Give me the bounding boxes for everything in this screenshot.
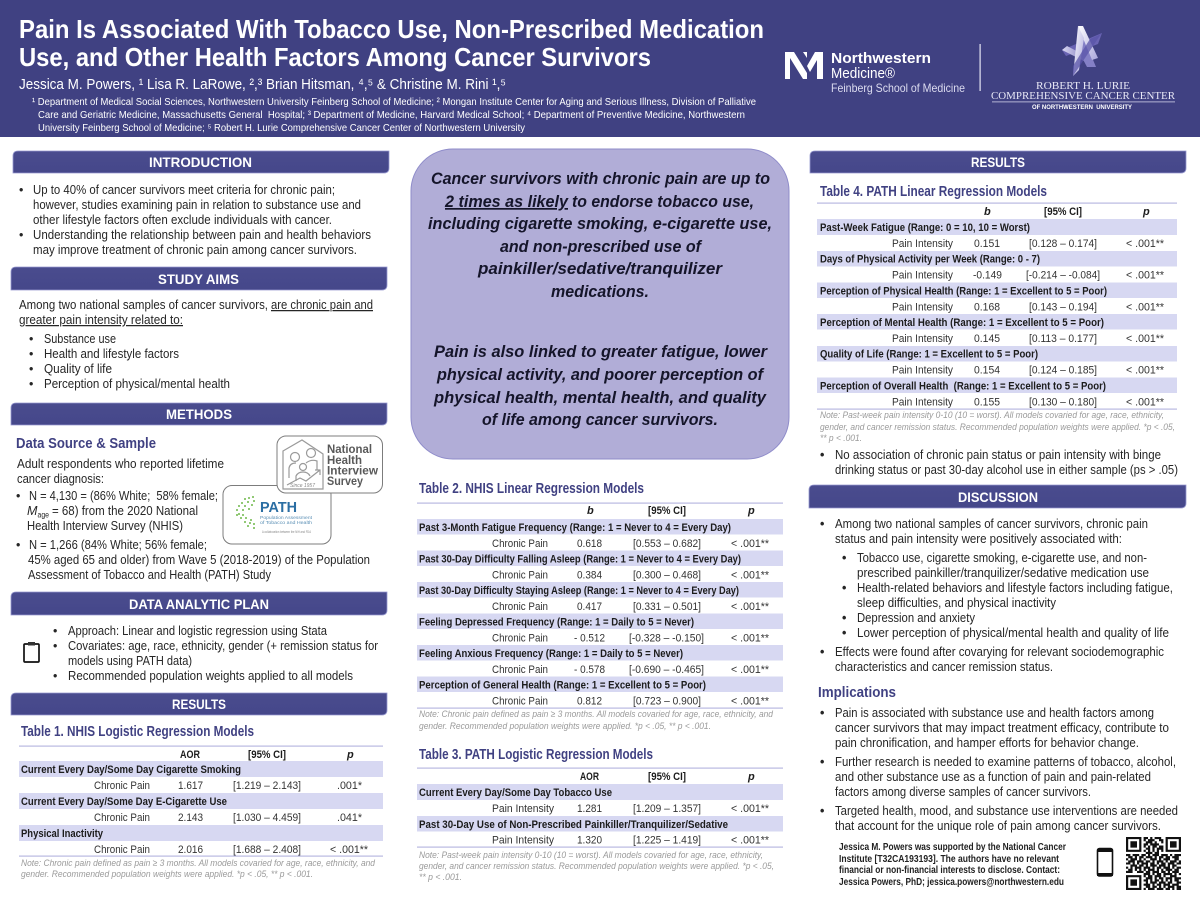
table title: table 4: Table 4. PATH Linear Regression Models [820,184,1047,200]
table 3: [1.225 – 1.419] [633,834,701,846]
text: sample description: 45% aged 65 and older) from Wave 5 (2018-2019) of the Population [28,553,370,567]
logo: Northwestern Medicine: Feinberg School of Medicine [831,81,965,95]
logo: National Health Interview Survey [277,436,382,493]
table 4: b [984,206,991,218]
table 4: [0.124 – 0.185] [1029,365,1097,377]
table 2: Past 3-Month Fatigue Frequency (Range: 1 = Never to 4 = Every Day) [419,522,731,534]
table 4: Pain Intensity [892,333,953,345]
table 1: < .001** [330,844,369,856]
table 3: Pain Intensity [492,803,554,815]
table note: table 2: Note: Chronic pain defined as pain ≥ 3 months. All models covaried for age, race, ethnicity, and [419,709,774,720]
table 4: < .001** [1126,238,1165,250]
table 3: Pain Intensity [492,834,554,846]
text: discussion findings: Among two national samples of cancer survivors, chronic pain [835,517,1148,531]
table note: table 1: gender. Recommended population weights were applied. *p < .05, ** p < .001. [21,869,313,880]
heading: results: RESULTS [172,696,226,712]
panel: study aims: Perception of physical/mental health [44,377,230,391]
table 1: p [346,749,354,761]
logo: National Health Interview Survey: Health [327,455,362,467]
text: implications: Further research is needed to examine patterns of tobacco, alcohol, [835,755,1176,769]
panel: study aims: greater pain intensity related to: [19,313,183,327]
affiliations: University Feinberg School of Medicine; ⁵ Robert H. Lurie Comprehensive Cancer Center of Northwestern University [38,122,526,134]
table 4: < .001** [1126,333,1165,345]
table 4: [-0.214 – -0.084] [1026,270,1100,282]
table title: table 2: Table 2. NHIS Linear Regression Models [419,481,644,497]
text: implications: and other substance use as a function of pain and pain-related [835,770,1151,784]
callout: key findings: medications. [551,282,649,301]
table 1: 2.143 [178,812,203,824]
table 2: 0.417 [577,601,602,613]
text: implications: Pain is associated with substance use and health factors among [835,706,1154,720]
panel: data analytic plan: models using PATH data) [68,654,192,668]
table 2: Feeling Depressed Frequency (Range: 1 = Daily to 5 = Never) [419,616,694,628]
table 2: b [587,505,594,517]
panel: study aims [11,267,387,391]
text: discussion findings: Tobacco use, cigarette smoking, e-cigarette use, and non- [857,551,1147,565]
text: no association finding: No association of chronic pain status or pain intensity with binge [835,448,1161,462]
title [19,14,764,72]
text: discussion findings: Effects were found after covarying for relevant sociodemographic [835,645,1164,659]
logo: Robert H. Lurie Comprehensive Cancer Center: COMPREHENSIVE CANCER CENTER [991,91,1175,102]
icon: house with family [283,440,323,489]
table 2: [-0.328 – -0.150] [629,632,704,644]
text: no association finding: • [820,448,824,462]
panel: results left, table 1 [11,693,387,880]
panel: study aims: are chronic pain and [271,298,373,312]
table 2: [-0.690 – -0.465] [629,664,704,676]
table 4: 0.145 [974,333,1000,345]
text: sample description: cancer diagnosis: [17,472,104,486]
table 2: [95% CI] [648,505,686,517]
header banner [0,0,1200,137]
panel: discussion [809,485,1186,833]
panel: data analytic plan [11,592,387,683]
text: discussion findings: sleep difficulties, and physical inactivity [857,596,1057,610]
heading: discussion [809,485,1186,508]
panel: study aims: • [29,377,33,391]
table 4: Pain Intensity [892,270,953,282]
text: sample description: N = 1,266 (84% White; 56% female; [29,538,207,552]
text: discussion findings: status and pain intensity were positively associated with: [835,532,1122,546]
table 1: [1.030 – 4.459] [233,812,301,824]
text: discussion findings: • [820,645,824,659]
table note: table 4 [820,410,1175,444]
table 4: < .001** [1126,396,1165,408]
table 4 [817,202,1177,410]
table 1: Physical Inactivity [21,828,104,840]
table 2: Chronic Pain [492,632,548,644]
table 3: 1.320 [577,834,602,846]
text: sample description: Assessment of Tobacco and Health (PATH) Study [28,568,272,582]
table 4: < .001** [1126,270,1165,282]
table 3: p [747,771,755,783]
table 4: < .001** [1126,365,1165,377]
table 2: Perception of General Health (Range: 1 = Excellent to 5 = Poor) [419,680,706,692]
logo: PATH [223,486,331,544]
icon: clipboard [24,642,39,662]
text: sample description [16,457,370,582]
table note: table 3: ** p < .001. [419,872,462,883]
panel: study aims: Health and lifestyle factors [44,347,179,361]
table 3: Current Every Day/Some Day Tobacco Use [419,787,612,799]
text: discussion findings: Health-related behaviors and lifestyle factors including fatigue, [857,581,1173,595]
text: discussion findings: • [842,551,846,565]
panel: introduction: however, studies examining pain in relation to substance use and [33,198,361,212]
table 4: < .001** [1126,301,1165,313]
icon: green dots [236,496,255,529]
table 3: < .001** [731,803,770,815]
panel: study aims: Among two national samples of cancer survivors, [19,298,268,312]
table 4: Quality of Life (Range: 1 = Excellent to 5 = Poor) [820,349,1038,361]
footer: funding and contact: Institute [T32CA193193]. The authors have no relevant [839,854,1060,865]
logo: National Health Interview Survey: Interview [327,466,378,478]
text: sample description: = 68) from the 2020 National [52,504,198,518]
table 4: Pain Intensity [892,301,953,313]
panel: study aims: Quality of life [44,362,112,376]
panel: data analytic plan: • [53,669,57,683]
panel: data analytic plan: Approach: Linear and logistic regression using Stata [68,624,327,638]
callout: key findings: physical activity, and poorer perception of [436,365,765,384]
table note: table 1: Note: Chronic pain defined as pain ≥ 3 months. All models covaried for age, race, ethnicity, and [21,858,376,869]
table 2: [0.553 – 0.682] [633,538,701,550]
panel: introduction [13,151,389,257]
table 3 [417,768,783,848]
table 2: < .001** [731,601,770,613]
panel: data analytic plan: Recommended population weights applied to all models [68,669,353,683]
table 2: < .001** [731,538,770,550]
table 1: Chronic Pain [94,812,150,824]
text: sample description: Health Interview Survey (NHIS) [27,519,183,533]
callout: key findings: including cigarette smoking, e-cigarette use, [428,214,772,233]
text: implications: • [820,706,824,720]
table 4: [0.143 – 0.194] [1029,301,1097,313]
table 2: [0.331 – 0.501] [633,601,701,613]
table 3: Past 30-Day Use of Non-Prescribed Painkiller/Tranquilizer/Sedative [419,819,728,831]
table 2: - 0.512 [574,632,605,644]
table note: table 3: Note: Past-week pain intensity 0-10 (10 = worst). All models covaried for age, race, ethnicity, [419,850,763,861]
table 3: 1.281 [577,803,602,815]
heading: introduction [13,151,389,173]
table 1: .041* [337,812,363,824]
table 2: Chronic Pain [492,538,548,550]
table 2 [417,502,783,709]
table note: table 4: Note: Past-week pain intensity 0-10 (10 = worst). All models covaried for age, race, ethnicity, [820,410,1164,421]
callout: key findings: Cancer survivors with chronic pain are up to [431,169,770,188]
panel: table 2 [417,481,783,732]
table 4: Perception of Overall Health (Range: 1 = Excellent to 5 = Poor) [820,380,1106,392]
heading: results [810,151,1186,173]
text: sample description: M [27,504,38,518]
logo: National Health Interview Survey: Since 1957 [290,483,315,489]
heading: data analytic plan: DATA ANALYTIC PLAN [129,596,269,612]
heading: results [11,693,387,715]
table 4: [95% CI] [1044,206,1082,218]
table 1: .001* [337,780,363,792]
logo: Robert H. Lurie Comprehensive Cancer Center: OF NORTHWESTERN UNIVERSITY [1032,105,1132,111]
table 2: < .001** [731,696,770,708]
table 4: p [1142,206,1150,218]
table note: table 1 [21,858,376,880]
table 3: [95% CI] [648,771,686,783]
table 4: Days of Physical Activity per Week (Range: 0 - 7) [820,254,1040,266]
icon: smartphone [1097,848,1113,876]
text: implications: pain chronification, and hamper efforts for behavior change. [835,736,1139,750]
panel: introduction: • [19,183,23,197]
heading: discussion: DISCUSSION [958,489,1038,505]
table 3: [1.209 – 1.357] [633,803,701,815]
logo: Northwestern Medicine: Medicine® [831,65,895,82]
QR code [1126,837,1181,890]
table note: table 2 [419,709,774,732]
text: discussion findings: prescribed painkiller/tranquilizer/sedative medication use [857,566,1149,580]
table note: table 3: gender, and cancer remission status. Recommended population weights were applied. *p < .05, [419,861,774,872]
logo: PATH: A collaboration between the NIH and FDA [262,530,312,534]
table 2: Chronic Pain [492,696,548,708]
footer: funding and contact [839,842,1066,888]
logo: Northwestern Medicine [785,50,965,95]
panel: introduction: Understanding the relationship between pain and health behaviors [33,228,371,242]
title: Pain Is Associated With Tobacco Use, Non-Prescribed Medication [19,14,764,44]
table 2: < .001** [731,632,770,644]
authors: Jessica M. Powers, ¹ Lisa R. LaRowe, ²,³ Brian Hitsman, ⁴,⁵ & Christine M. Rini ¹,⁵ [19,76,506,93]
panel: study aims: • [29,332,33,346]
table 4: Perception of Mental Health (Range: 1 = Excellent to 5 = Poor) [820,317,1104,329]
table 4: -0.149 [973,270,1002,282]
logo: PATH: of Tobacco and Health [260,520,313,525]
panel: introduction: Up to 40% of cancer survivors meet criteria for chronic pain; [33,183,335,197]
table 4: 0.151 [974,238,1000,250]
heading: data analytic plan [11,592,387,615]
affiliations: Care and Geriatric Medicine, Massachusetts General Hospital; ³ Department of Medicine, Harvard Medical School; ⁴ Department of Preventive Medicine, Northwestern [38,109,745,121]
logo: Robert H. Lurie Comprehensive Cancer Center: ROBERT H. LURIE [1036,81,1130,92]
logo: Northwestern Medicine: Northwestern [831,50,931,67]
table 2: [0.723 – 0.900] [633,696,701,708]
table 2: Chronic Pain [492,664,548,676]
table 2: Chronic Pain [492,601,548,613]
text: implications: that account for the unique role of pain among cancer survivors. [835,819,1161,833]
callout: key findings: painkiller/sedative/tranquilizer [477,259,723,278]
table 1: [1.219 – 2.143] [233,780,301,792]
table 2: p [747,505,755,517]
logo: National Health Interview Survey: National [327,444,372,456]
table 1: 2.016 [178,844,203,856]
heading: results: RESULTS [971,154,1025,170]
table 3: AOR [580,771,599,783]
callout: key findings [411,149,789,459]
text: sample description: • [16,489,20,503]
text: sample description: • [16,538,20,552]
icon: ribbon star [1062,26,1102,76]
title: Use, and Other Health Factors Among Cancer Survivors [19,42,651,72]
table 4: [0.130 – 0.180] [1029,396,1097,408]
table 4: Pain Intensity [892,365,953,377]
text: discussion findings: • [820,517,824,531]
text: implications: cancer survivors that may impact treatment efficacy, contribute to [835,721,1169,735]
text: discussion findings: • [842,626,846,640]
footer: funding and contact: financial or non-financial interests to disclose. Contact: [839,865,1060,876]
table 2: Feeling Anxious Frequency (Range: 1 = Daily to 5 = Never) [419,648,683,660]
text: discussion findings: • [842,611,846,625]
logo: PATH: PATH [260,499,297,516]
table note: table 3 [419,850,774,883]
heading: methods: METHODS [166,406,232,422]
panel: introduction: • [19,228,23,242]
subheading: implications: Implications [818,685,896,701]
table 4: [0.128 – 0.174] [1029,238,1097,250]
table 2: < .001** [731,664,770,676]
table 1 [19,746,383,857]
callout: key findings: and non-prescribed use of [500,237,703,256]
table note: table 4: ** p < .001. [820,433,862,444]
text: no association finding [820,448,1178,477]
text: discussion findings: • [842,581,846,595]
table 2: Chronic Pain [492,570,548,582]
logo: National Health Interview Survey: Survey [327,476,364,488]
table 1: Current Every Day/Some Day Cigarette Smoking [21,764,241,776]
panel: study aims: Substance use [44,332,116,346]
panel: data analytic plan: • [53,639,57,653]
table 4: Perception of Physical Health (Range: 1 = Excellent to 5 = Poor) [820,285,1107,297]
table 4: Pain Intensity [892,238,953,250]
table 2: 0.618 [577,538,602,550]
logo: Robert H. Lurie Comprehensive Cancer Center [991,26,1175,111]
table 1: Chronic Pain [94,780,150,792]
panel: data analytic plan: Covariates: age, race, ethnicity, gender (+ remission status for [68,639,378,653]
text: discussion findings [820,517,1173,674]
footer: funding and contact: Jessica Powers, PhD; jessica.powers@northwestern.edu [839,877,1064,888]
panel: table 3 [417,747,783,883]
heading: methods [11,403,387,425]
text: implications: • [820,755,824,769]
text: implications: • [820,804,824,818]
footer: funding and contact: Jessica M. Powers was supported by the National Cancer [839,842,1066,853]
table 1: [95% CI] [248,749,286,761]
panel: data analytic plan: • [53,624,57,638]
subheading: data source and sample: Data Source & Sample [16,436,156,452]
text: sample description: N = 4,130 = (86% White; 58% female; [29,489,218,503]
logo: PATH: Population Assessment [260,515,313,520]
table 1: AOR [180,749,200,761]
panel: study aims: • [29,347,33,361]
panel: results right, table 4 [810,151,1186,477]
table 4: 0.168 [974,301,1000,313]
affiliations: ¹ Department of Medical Social Sciences, Northwestern University Feinberg School of Medicine; ² Mongan Institute Center for Aging and Serious Illness, Division of Palliative [32,96,756,108]
text: implications [820,706,1178,833]
text: sample description: age [38,510,49,520]
table title: table 1: Table 1. NHIS Logistic Regression Models [21,724,254,740]
table 2: - 0.578 [574,664,605,676]
table 2: 0.384 [577,570,602,582]
table 4: Pain Intensity [892,396,953,408]
panel: study aims: • [29,362,33,376]
table 2: 0.812 [577,696,602,708]
table title: table 3: Table 3. PATH Logistic Regression Models [419,747,653,763]
text: sample description: Adult respondents who reported lifetime [17,457,224,471]
table 4: 0.155 [974,396,1000,408]
callout: key findings: to endorse tobacco use, [572,192,754,211]
callout: key findings: physical health, mental health, and quality [433,388,767,407]
table 1: Chronic Pain [94,844,150,856]
table 1: 1.617 [178,780,203,792]
table 4: 0.154 [974,365,1000,377]
table 2: Past 30-Day Difficulty Staying Asleep (Range: 1 = Never to 4 = Every Day) [419,585,739,597]
panel: introduction: may improve treatment of chronic pain among cancer survivors. [33,243,357,257]
table 1: [1.688 – 2.408] [233,844,301,856]
panel: methods [11,403,387,582]
affiliations [32,96,756,134]
callout: key findings: 2 times as likely [444,192,569,211]
table 4: Past-Week Fatigue (Range: 0 = 10, 10 = Worst) [820,222,1030,234]
heading: study aims: STUDY AIMS [158,271,239,287]
text: discussion findings: characteristics and cancer remission status. [835,660,1053,674]
table 2: Past 30-Day Difficulty Falling Asleep (Range: 1 = Never to 4 = Every Day) [419,554,741,566]
text: implications: factors among diverse samples of cancer survivors. [835,785,1091,799]
heading: study aims [11,267,387,290]
table note: table 2: gender. Recommended population weights were applied. *p < .05, ** p < .001. [419,721,711,732]
text: discussion findings: Depression and anxiety [857,611,976,625]
callout: key findings: of life among cancer survivors. [482,410,718,429]
table 1: Current Every Day/Some Day E-Cigarette Use [21,796,227,808]
text: discussion findings: Lower perception of physical/mental health and quality of life [857,626,1169,640]
heading: introduction: INTRODUCTION [149,154,252,170]
panel: introduction: other lifestyle factors often exclude individuals with cancer. [33,213,332,227]
table 3: < .001** [731,834,770,846]
table 2: < .001** [731,570,770,582]
table 2: [0.300 – 0.468] [633,570,701,582]
table 4: [0.113 – 0.177] [1029,333,1097,345]
callout: key findings: Pain is also linked to greater fatigue, lower [434,342,768,361]
